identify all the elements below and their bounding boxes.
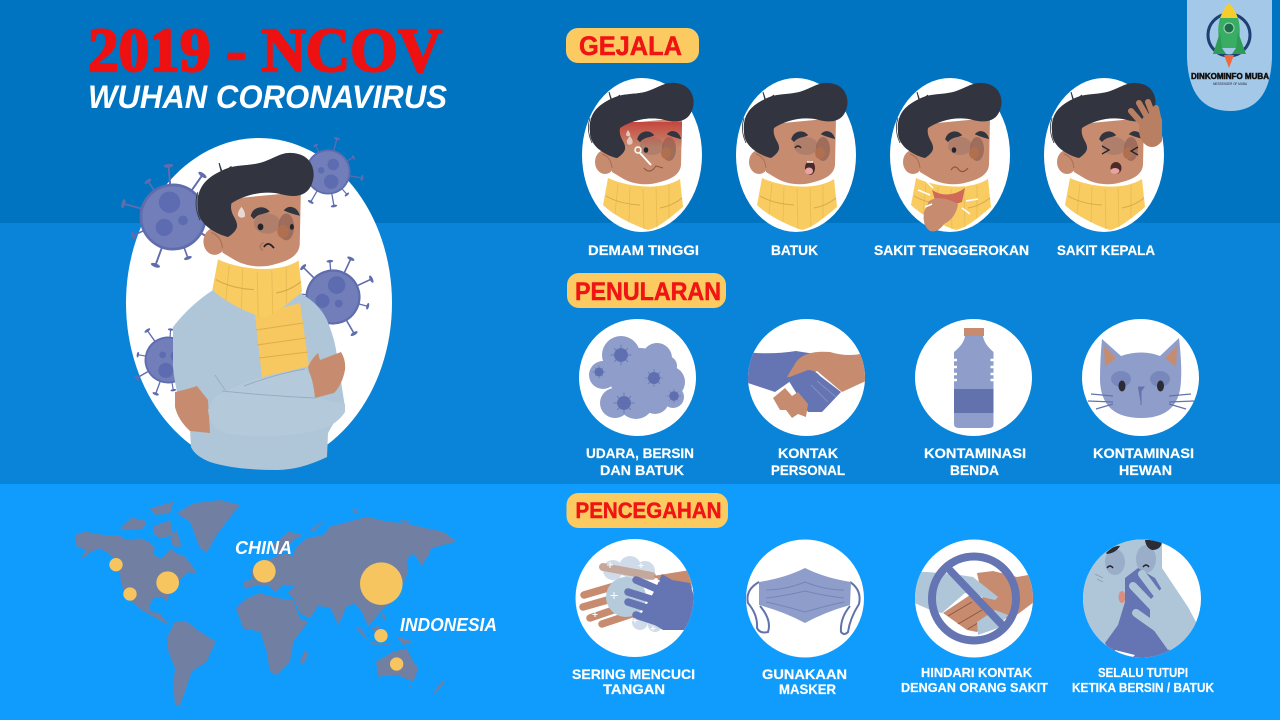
world map [75, 500, 497, 707]
pill heading: PENCEGAHAN: PENCEGAHAN [576, 498, 722, 523]
symptom: sakit tenggorokan [890, 78, 1010, 232]
label: MASKER [779, 681, 836, 697]
icon: bottle [954, 328, 994, 428]
map label: Indonesia: INDONESIA [400, 615, 497, 635]
label: SERING MENCUCI [572, 666, 695, 682]
symptom: batuk [736, 78, 856, 232]
transmission: kontaminasi hewan [1082, 319, 1199, 436]
prevention: mencuci tangan [576, 539, 695, 657]
label: BATUK [771, 242, 818, 258]
background: dark blue band [0, 0, 1280, 223]
label: KONTAMINASI [924, 445, 1026, 461]
label: DENGAN ORANG SAKIT [901, 680, 1048, 695]
logo: Dinkominfo Muba [1187, 0, 1272, 111]
label: SAKIT TENGGEROKAN [874, 242, 1029, 258]
label: GUNAKAAN [762, 666, 847, 682]
transmission: udara [579, 319, 696, 436]
icon: cloud [589, 336, 685, 419]
pill heading: PENULARAN: PENULARAN [575, 278, 721, 306]
label: KONTAMINASI [1093, 445, 1194, 461]
map land [75, 500, 457, 707]
head with scarf [196, 153, 314, 318]
label: TANGAN [603, 681, 665, 697]
background: light blue band [0, 484, 1280, 720]
transmission: kontaminasi benda [915, 319, 1032, 436]
map label: China: CHINA [235, 538, 292, 558]
left hand [175, 386, 210, 433]
label: DAN BATUK [600, 462, 684, 478]
symptom: demam tinggi [582, 78, 702, 232]
label: SAKIT KEPALA [1057, 242, 1155, 258]
map bubbles [109, 558, 403, 671]
icon: cat [1088, 338, 1194, 418]
icon: covering cough [1080, 538, 1196, 660]
right hand [308, 352, 345, 398]
forearm [208, 369, 345, 436]
prevention: masker [746, 540, 864, 658]
label: SELALU TUTUPI [1098, 665, 1188, 680]
sweater body [173, 290, 345, 470]
background: middle blue band [0, 223, 1280, 484]
icon: mask [747, 568, 860, 634]
pill heading: PENCEGAHAN [566, 493, 728, 528]
subtitle: WUHAN CORONAVIRUS [88, 79, 448, 115]
label: UDARA, BERSIN [586, 445, 694, 461]
icon: washing hands [583, 556, 695, 632]
label: BENDA [950, 462, 999, 478]
logo tagline: MESSENGER OF MUBA [1213, 82, 1248, 86]
icon: viruses [117, 133, 386, 407]
icon: cloud viruses [592, 345, 681, 413]
title: 2019 - NCOV [88, 17, 442, 85]
icon: handshake [745, 351, 868, 418]
transmission: kontak personal [745, 319, 868, 436]
label: PERSONAL [771, 462, 845, 478]
icon: no handshake [912, 556, 1034, 640]
icon: rocket [1208, 3, 1250, 68]
label: HINDARI KONTAK [921, 665, 1033, 680]
yellow shirt [255, 303, 309, 378]
pill heading: GEJALA: GEJALA [579, 31, 682, 61]
logo text: DINKOMINFO MUBA [1191, 72, 1269, 81]
illustration: sick man with viruses [117, 133, 392, 470]
label: HEWAN [1119, 462, 1172, 478]
label: KETIKA BERSIN / BATUK [1072, 680, 1215, 695]
label: DEMAM TINGGI [588, 242, 699, 258]
white oval backdrop [126, 138, 392, 468]
prevention: hindari kontak [912, 540, 1034, 658]
prevention: tutup mulut [1080, 538, 1201, 660]
symptom: sakit kepala [1044, 78, 1165, 232]
label: KONTAK [778, 445, 838, 461]
